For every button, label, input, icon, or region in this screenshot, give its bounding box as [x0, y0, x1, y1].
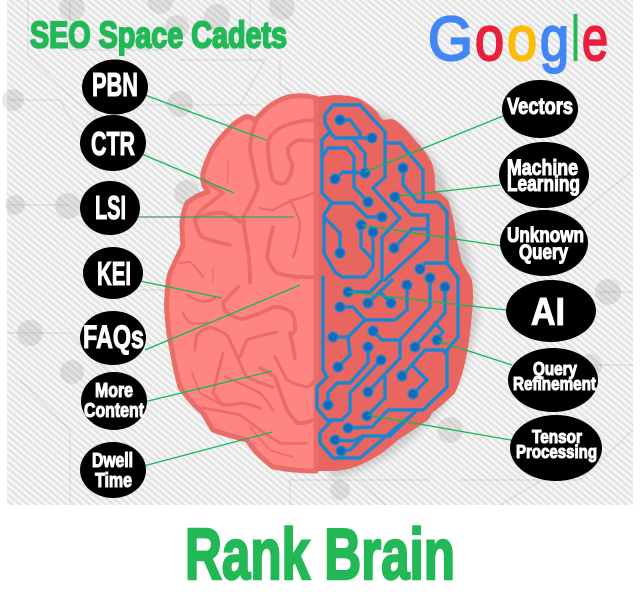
label: More Content: More [95, 380, 133, 402]
label: PBN [82, 60, 148, 114]
label: Query Refinement: Query [533, 359, 577, 379]
label: CTR: CTR [91, 125, 135, 162]
label: Vectors [502, 80, 578, 138]
label: Dwell Time: Dwell [92, 450, 133, 472]
label: KEI [83, 247, 143, 299]
label: AI: AI [531, 291, 565, 334]
circuit nodes [323, 115, 450, 456]
label: Dwell Time: Time [95, 470, 132, 492]
label: Query Refinement: Refinement [513, 374, 596, 394]
circuit traces on right hemisphere [317, 105, 458, 458]
heading: SEO Space Cadets: SEO Space Cadets [30, 14, 287, 56]
label: Tensor Processing: Processing [516, 442, 597, 462]
logo: Google: o [475, 5, 504, 74]
label: Tensor Processing: Tensor [532, 427, 582, 447]
brain: left hemisphere [166, 96, 316, 471]
label: Dwell Time [80, 442, 146, 498]
logo: Google: e [582, 5, 608, 74]
label: AI [506, 280, 596, 342]
logo: Google: o [507, 5, 537, 74]
label: Query Refinement [508, 348, 598, 412]
label: Machine Learning: Learning [507, 171, 580, 196]
label: Vectors: Vectors [507, 93, 573, 119]
label: CTR [80, 115, 146, 171]
logo: Google [428, 5, 608, 74]
label: Tensor Processing [510, 415, 602, 481]
label: LSI [80, 181, 140, 235]
label: Unknown Query [500, 210, 588, 276]
logo: Google: G [428, 5, 473, 74]
brain: right half (circuit hemisphere base) [310, 95, 473, 471]
label: Unknown Query: Query [519, 241, 568, 264]
label: Machine Learning: Machine [507, 155, 578, 180]
label: LSI: LSI [95, 189, 126, 226]
title: Rank Brain: Rank Brain [185, 515, 455, 595]
connector lines [135, 95, 516, 467]
label: More Content [81, 372, 147, 430]
label: FAQs: FAQs [83, 319, 144, 355]
label: FAQs [80, 311, 146, 365]
label: Machine Learning [499, 142, 589, 208]
brain shadow [330, 100, 478, 478]
label: PBN: PBN [92, 66, 138, 103]
logo: Google: l [572, 5, 579, 74]
label: More Content: Content [84, 400, 144, 422]
logo: Google: g [540, 5, 569, 74]
label: Unknown Query: Unknown [507, 224, 584, 247]
label: KEI: KEI [97, 255, 131, 292]
